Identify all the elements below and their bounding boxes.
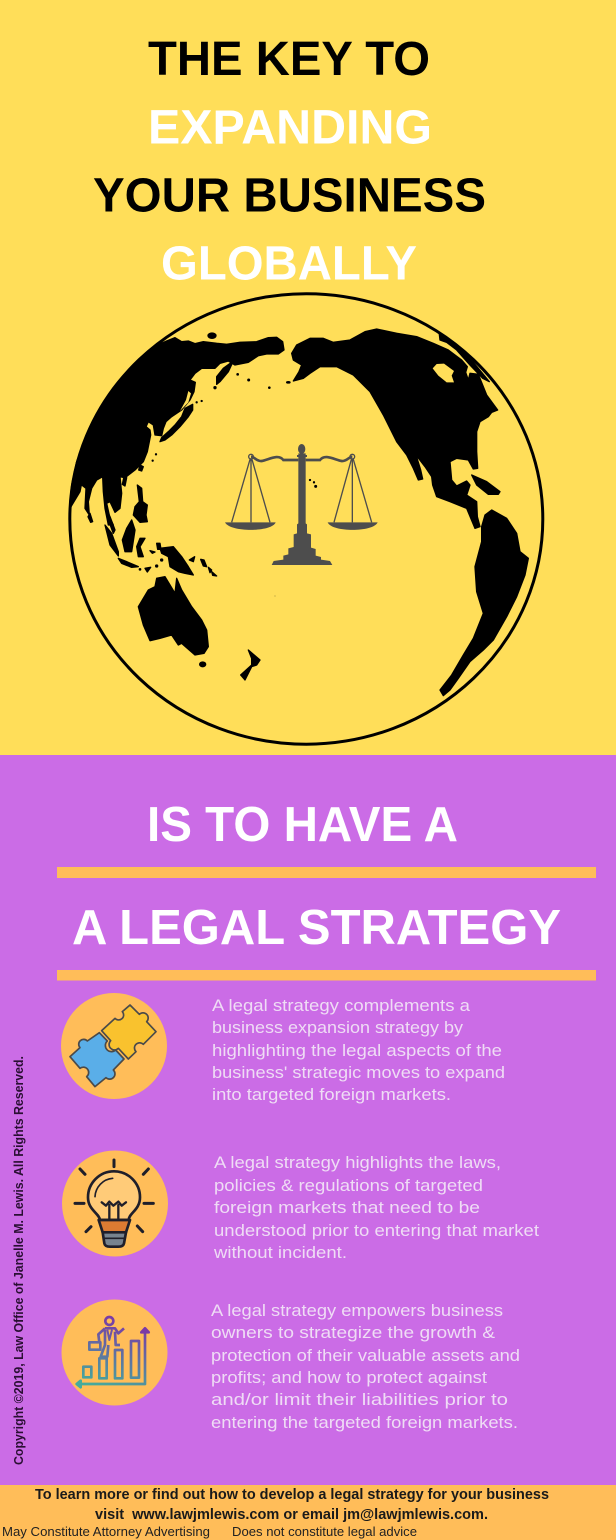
landmass: South America [440,510,528,696]
text: laws policies regulations: without incident. [213,1244,347,1262]
text: laws policies regulations: A legal strategy highlights the laws, [214,1154,501,1172]
icon: light bulb [62,1150,168,1256]
text: legal strategy complements: business' strategic moves to expand [212,1064,505,1082]
divider bar upper [57,867,596,878]
text: legal strategy complements: A legal strategy complements a [212,997,471,1015]
growth drawing [77,1317,149,1387]
globe illustration [70,294,543,744]
text: laws policies regulations: policies & regulations of targeted [214,1177,483,1195]
footer disclaimer: Does not constitute legal advice [232,1524,417,1539]
text: strategize growth and protection: entering the targeted foreign markets. [211,1414,518,1432]
panel: orange footer band [0,1485,616,1540]
text: strategize growth and protection: and/or limit their liabilities prior to [211,1391,508,1409]
puzzle pieces [70,1005,156,1087]
scales post and base [272,453,332,565]
title [93,33,486,290]
footer call to action [35,1487,549,1523]
copyright vertical text: Copyright ©2019, Law Office of Janelle M. Lewis. All Rights Reserved. [12,1056,26,1465]
panel: yellow top section [0,0,616,755]
footer disclaimer: May Constitute Attorney Advertising [2,1524,210,1539]
text: strategize growth and protection: protection of their valuable assets and [211,1347,520,1365]
icon: scales of justice [225,444,378,565]
bulb icon circle [62,1150,168,1256]
panel: purple lower section [0,755,616,1485]
text: legal strategy complements: highlighting the legal aspects of the [212,1042,502,1060]
title line 1: THE KEY TO [148,33,430,86]
text: legal strategy complements: business expansion strategy by [212,1019,464,1037]
heading: a legal strategy: A LEGAL STRATEGY [72,901,561,955]
icon: growth chart with climbing figure [62,1300,168,1406]
landmass: North America and Greenland [292,329,500,528]
text: laws policies regulations: understood prior to entering that market [214,1222,539,1240]
text: strategize growth and protection [211,1302,520,1432]
text: strategize growth and protection: profits; and how to protect against [211,1369,487,1387]
icon: puzzle pieces [61,993,167,1099]
puzzle icon circle [61,993,167,1099]
scales right arm and pan [306,454,378,530]
text: strategize growth and protection: owners to strategize the growth & [211,1324,495,1342]
text: strategize growth and protection: A legal strategy empowers business [211,1302,503,1320]
globe outline [70,294,543,744]
title line 3: YOUR BUSINESS [93,170,486,222]
text: legal strategy complements: into targeted foreign markets. [212,1086,451,1104]
footer disclaimer [2,1524,417,1539]
scales left arm and pan [225,454,298,530]
text: laws policies regulations: foreign markets that need to be [214,1199,480,1217]
text: legal strategy complements [212,997,505,1104]
title line 2: EXPANDING [148,102,432,154]
footer call to action: To learn more or find out how to develop a legal strategy for your business [35,1487,549,1503]
bulb drawing [75,1160,153,1247]
growth icon circle [62,1300,168,1406]
landmass: Asia [70,333,290,525]
divider bar lower [57,970,596,980]
heading: is to have a: IS TO HAVE A [147,798,458,852]
title line 4: GLOBALLY [161,238,417,290]
footer call to action: visit www.lawjmlewis.com or email jm@lawjmlewis.com. [95,1507,488,1523]
text: laws policies regulations [213,1154,539,1262]
landmass: Australia and islands [105,510,275,680]
